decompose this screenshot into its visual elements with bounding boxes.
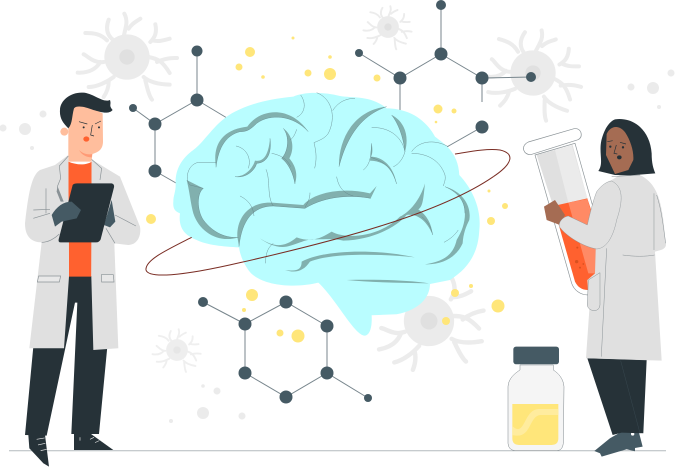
- man skin: [60, 102, 103, 162]
- neuron: lower left small: [151, 326, 204, 374]
- woman trousers: [587, 358, 647, 435]
- woman hand: [544, 200, 565, 225]
- man coat details: [33, 156, 136, 282]
- woman coat details: [601, 175, 666, 357]
- molecule: top left: [129, 46, 232, 183]
- scientist: man with tablet: [25, 93, 140, 467]
- brain: [173, 93, 480, 336]
- man shoes: [28, 433, 113, 467]
- woman sleeve: [559, 181, 621, 249]
- scientist: woman holding tube: [544, 119, 666, 457]
- man hair: [60, 93, 113, 128]
- ground line: [9, 450, 666, 452]
- man left glove: [52, 202, 81, 227]
- neuron: lower right: [365, 262, 493, 379]
- man trousers: [25, 276, 107, 436]
- brain fold lines: [187, 93, 465, 263]
- neuron: top small: [361, 2, 415, 51]
- woman shoes: [594, 430, 643, 457]
- tube rim: [524, 129, 581, 155]
- gray dots: [0, 70, 674, 423]
- tube liquid: [553, 198, 597, 290]
- man shirt: [68, 162, 92, 277]
- molecule: top right: [355, 0, 536, 148]
- test tube: [524, 129, 597, 295]
- jar body: [508, 365, 564, 451]
- woman facial features: [607, 141, 626, 159]
- woman hair: [598, 119, 655, 175]
- man face: [79, 121, 101, 142]
- brain silhouette: [173, 93, 480, 336]
- tube glass: [535, 143, 597, 295]
- man lab coat: [25, 155, 140, 350]
- man right glove: [104, 200, 115, 227]
- neuron: top left: [78, 14, 177, 100]
- orbit ring: front part: [146, 177, 493, 275]
- woman face: [606, 127, 633, 174]
- tablet: [59, 183, 114, 242]
- neuron: top right: [474, 18, 593, 127]
- jar cap: [513, 347, 559, 364]
- glass jar with yellow liquid: [508, 347, 564, 451]
- brain fold shadows: [187, 107, 470, 283]
- jar liquid: [512, 404, 558, 445]
- molecule: bottom hexagon: [198, 296, 372, 404]
- woman coat: [586, 175, 666, 361]
- yellow dots: [146, 36, 508, 342]
- orbit ring: back part: [455, 150, 510, 177]
